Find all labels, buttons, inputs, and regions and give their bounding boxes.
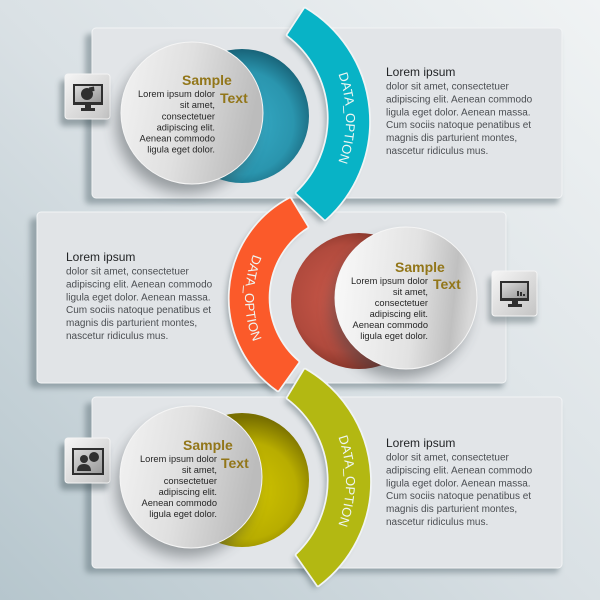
paragraph: middle: dolor sit amet, consectetuer <box>66 266 190 278</box>
circle text: adipiscing elit. <box>370 309 428 319</box>
paragraph: middle: ligula eget dolor. Aenean massa. <box>66 292 211 304</box>
circle title: Sample <box>183 437 233 453</box>
arc: olive: DATA_OPTION <box>338 435 356 527</box>
paragraph: top: ligula eget dolor. Aenean massa. <box>386 108 531 118</box>
paragraph: middle: nascetur ridiculus mus. <box>66 331 168 342</box>
arc: teal <box>282 7 371 224</box>
circle text: Lorem ipsum dolor <box>138 89 215 99</box>
circle text: sit amet, <box>182 465 217 475</box>
circle text: Aenean commodo <box>353 320 428 330</box>
circle title: Sample <box>182 72 232 88</box>
paragraph: bottom: dolor sit amet, consectetuer <box>386 452 510 464</box>
paragraph: top <box>386 65 533 157</box>
panel: middle row <box>30 212 537 388</box>
paragraph: top: nascetur ridiculus mus. <box>386 146 488 157</box>
circle text: adipiscing elit. <box>157 122 215 132</box>
circle text: ligula eget dolor. <box>360 331 428 341</box>
paragraph: bottom: magnis dis parturient montes, <box>386 504 517 515</box>
circle text: adipiscing elit. <box>159 487 217 497</box>
white circle <box>116 42 263 193</box>
circle text: consectetuer <box>375 298 428 308</box>
paragraph: bottom: ligula eget dolor. Aenean massa. <box>386 478 531 490</box>
circle text: Lorem ipsum dolor <box>351 276 428 286</box>
circle title: Text <box>221 455 249 471</box>
white circle <box>116 406 262 557</box>
paragraph: bottom <box>386 436 533 528</box>
arc: orange: DATA_OPTION <box>242 255 262 341</box>
paragraph: top: magnis dis parturient montes, <box>386 133 517 144</box>
circle text: consectetuer <box>164 476 217 486</box>
circle title <box>395 259 461 292</box>
paragraph: middle: magnis dis parturient montes, <box>66 318 197 329</box>
icon: monitor with pie chart <box>60 74 110 126</box>
circle text: ligula eget dolor. <box>149 509 217 519</box>
paragraph: middle: adipiscing elit. Aenean commodo <box>66 280 213 290</box>
circle text <box>138 89 215 154</box>
circle text: Aenean commodo <box>140 134 215 144</box>
paragraph: middle <box>66 250 213 342</box>
paragraph: bottom: adipiscing elit. Aenean commodo <box>386 466 533 476</box>
panel: bottom row <box>60 397 562 573</box>
paragraph: bottom: Cum sociis natoque penatibus et <box>386 491 531 502</box>
panel: top row <box>60 28 562 204</box>
circle text: Lorem ipsum dolor <box>140 454 217 464</box>
red circle <box>291 233 427 369</box>
arc: orange <box>223 196 309 395</box>
circle text: sit amet, <box>393 287 428 297</box>
white circle <box>330 227 477 378</box>
paragraph: top: adipiscing elit. Aenean commodo <box>386 94 533 106</box>
circle text <box>140 454 217 519</box>
olive circle <box>175 413 309 547</box>
circle title: Sample <box>395 259 445 275</box>
paragraph: top: Lorem ipsum <box>386 65 455 79</box>
circle title: Text <box>433 276 461 292</box>
circle text: ligula eget dolor. <box>147 144 215 154</box>
icon: monitor with bar chart <box>488 271 537 323</box>
paragraph: top: Cum sociis natoque penatibus et <box>386 120 531 131</box>
paragraph: middle: Lorem ipsum <box>66 250 135 264</box>
circle text: sit amet, <box>180 100 215 110</box>
icon: presenter with pie chart <box>60 438 110 490</box>
circle title: Text <box>220 90 248 106</box>
teal circle <box>175 49 309 183</box>
circle title <box>182 72 248 106</box>
paragraph: top: dolor sit amet, consectetuer <box>386 82 510 92</box>
arc: olive <box>282 368 372 590</box>
circle text <box>351 276 428 341</box>
circle title <box>183 437 249 471</box>
paragraph: bottom: nascetur ridiculus mus. <box>386 517 488 528</box>
paragraph: bottom: Lorem ipsum <box>386 436 455 450</box>
circle text: Aenean commodo <box>142 498 217 508</box>
paragraph: middle: Cum sociis natoque penatibus et <box>66 305 211 316</box>
circle text: consectetuer <box>162 112 215 122</box>
arc: teal: DATA_OPTION <box>338 72 356 164</box>
